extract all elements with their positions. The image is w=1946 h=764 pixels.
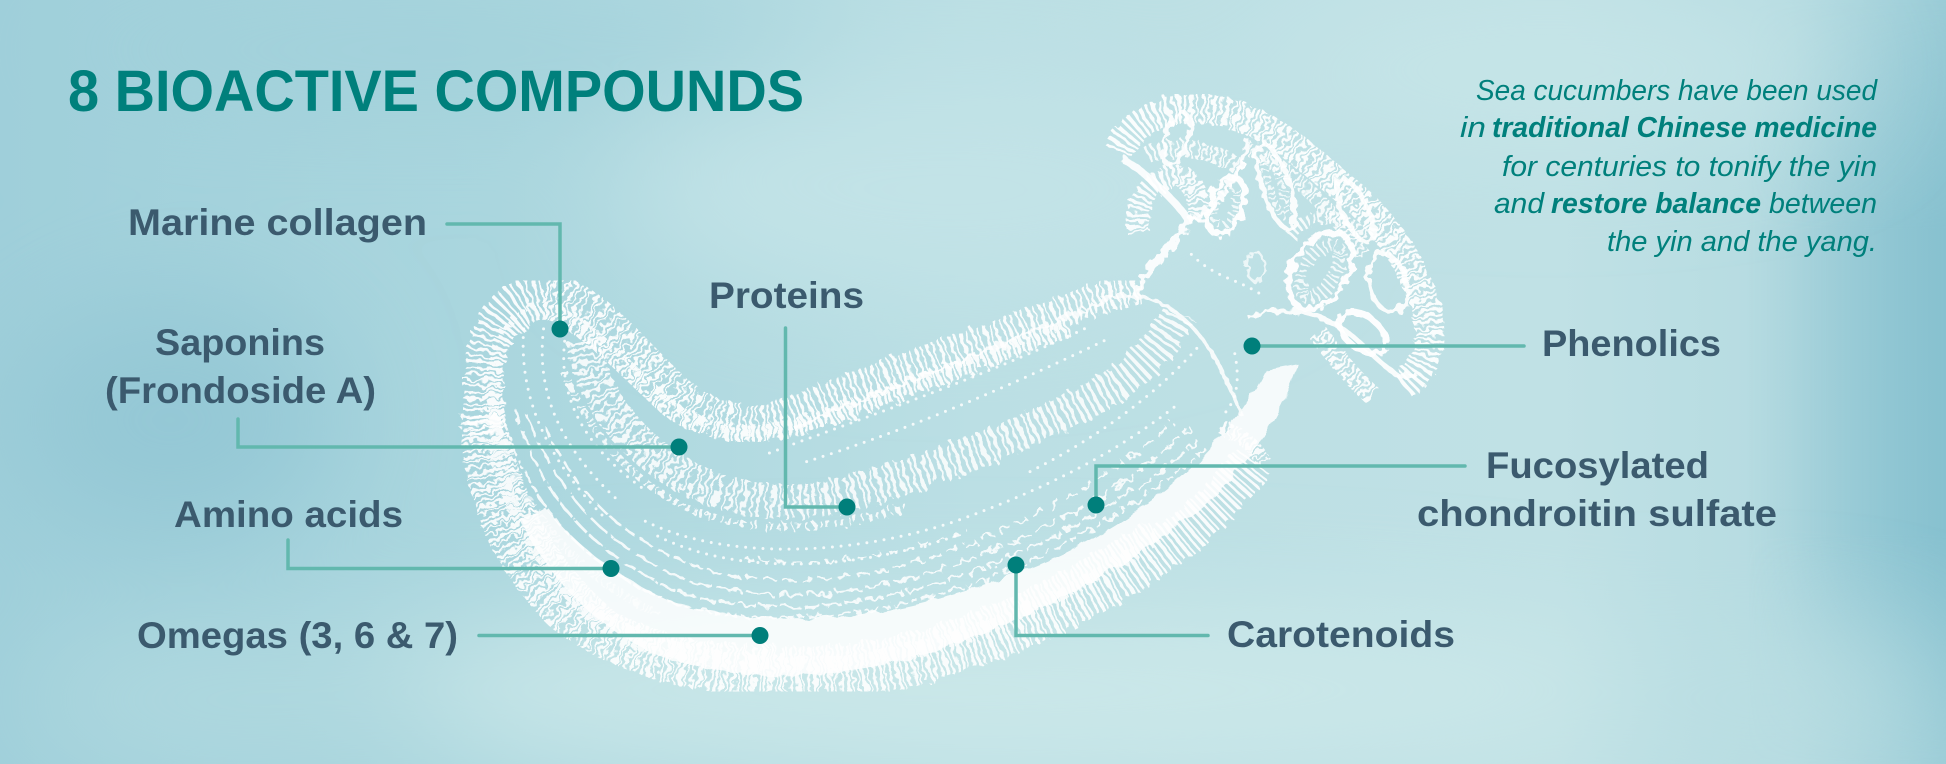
belly solid band: [521, 364, 1298, 676]
loop hatching: [1292, 237, 1349, 304]
callout: Marine collagen: [128, 202, 568, 338]
callout: Fucosylated chondroitin sulfate: chondroitin sulfate: [1417, 493, 1777, 534]
illustration: sea cucumber: [480, 108, 1429, 678]
body outline and hatching: [496, 296, 1241, 618]
callout: Carotenoids: [1008, 556, 1455, 655]
intro text: restore balance: [1551, 188, 1761, 220]
callout: Marine collagen: Marine collagen: [128, 202, 427, 243]
callout: Fucosylated chondroitin sulfate: [1088, 445, 1777, 534]
middle row of tube feet: [565, 313, 1179, 527]
intro text: Sea cucumbers have been used: [1476, 75, 1878, 107]
tentacle crown fringe: [1119, 108, 1429, 387]
intro text: and: [1494, 188, 1545, 220]
callout: Omegas: [137, 615, 768, 656]
callout: Amino acids: [174, 494, 620, 577]
intro text: in: [1460, 112, 1486, 144]
interior stippling: [523, 254, 1266, 564]
intro text: between: [1769, 188, 1877, 220]
callout: Phenolics: Phenolics: [1542, 323, 1721, 364]
intro text: the yin and the yang.: [1607, 226, 1877, 258]
callout: Saponins: (Frondoside A): [105, 370, 376, 411]
callout: Proteins: [709, 275, 864, 516]
lower outer fringe: [482, 416, 1263, 678]
tentacle stems: [1123, 159, 1189, 295]
callout: Saponins: Saponins: [155, 322, 325, 363]
intro text: [1460, 75, 1878, 258]
callout: Omegas: Omegas (3, 6 & 7): [137, 615, 458, 656]
callout: Proteins: Proteins: [709, 275, 864, 316]
intro text: for centuries to tonify the yin: [1502, 151, 1877, 183]
title: 8 BIOACTIVE COMPOUNDS: [68, 59, 804, 124]
callout: Saponins: [105, 322, 688, 456]
callout: Phenolics: [1244, 323, 1721, 364]
tentacle loops: [1201, 173, 1251, 240]
callout: Carotenoids: Carotenoids: [1227, 614, 1455, 655]
upper dorsal fringe: [480, 288, 1144, 434]
second tentacle fringe: [1138, 176, 1199, 233]
callout: Fucosylated chondroitin sulfate: Fucosylated: [1486, 445, 1709, 486]
intro text: traditional Chinese medicine: [1492, 112, 1877, 144]
head tentacles: [1119, 108, 1429, 395]
callout: Amino acids: Amino acids: [174, 494, 403, 535]
